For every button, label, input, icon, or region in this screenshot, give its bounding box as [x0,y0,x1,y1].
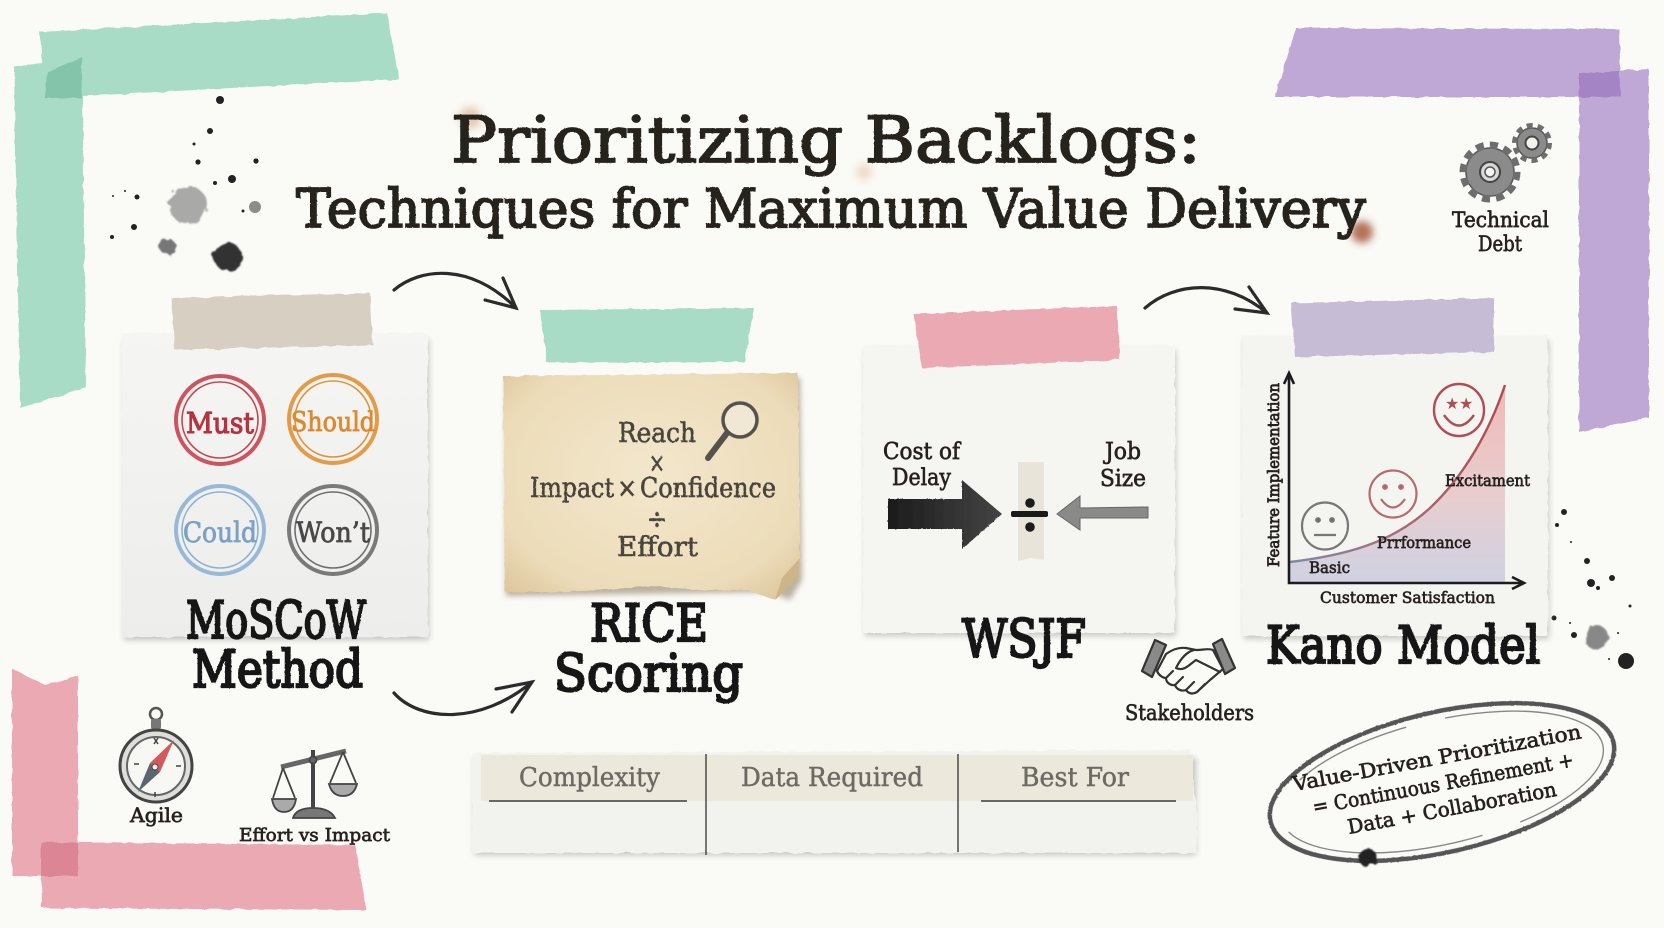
stamp: wont: Won’t [296,516,371,549]
icon: magnifier [708,403,757,458]
callout text: Value-Driven Prioritization [1290,719,1583,796]
label: cost of delay [883,439,961,491]
icon: handshake [1142,639,1235,693]
panel: kano model [1242,298,1549,639]
column dividers [489,754,1176,855]
label: technical debt: Technical [1452,208,1549,232]
kano chart [1264,373,1531,607]
panel: wsjf [863,306,1176,636]
formula: Confidence [640,473,776,504]
tape [540,308,754,363]
arrow: wsjf to kano [1145,287,1267,313]
heading: moscow method: MoSCoW [186,592,366,651]
formula: Effort [617,532,698,563]
header band [481,755,1193,801]
panel: rice [503,308,802,600]
stamp: must: Must [186,406,254,440]
curve label: performance: Prrformance [1377,533,1471,552]
ink splatter: top left [110,96,261,271]
divide sign [1011,498,1048,532]
face: smile [1370,470,1416,518]
formula: Impact [530,473,614,504]
stamp: should: Should [291,407,375,438]
header: best for: Best For [1021,763,1130,793]
paper curl [775,558,800,600]
ink splatter: bottom right [1536,509,1634,669]
axis label: y: Feature Implementation [1264,383,1283,567]
arrow: moscow to rice lower [394,682,532,715]
callout: value-driven prioritization [1255,674,1629,890]
heading: moscow method [186,592,366,700]
callout text: Data + Collaboration [1346,777,1559,839]
formula: Reach [618,418,696,449]
callout text [1290,719,1583,839]
heading: rice scoring: Scoring [554,645,743,704]
table sheet [472,750,1198,853]
icon: gears [1463,126,1550,199]
heading: moscow method: Method [192,641,363,700]
heading: wsjf: WSJF [962,610,1086,670]
axes [1284,373,1524,589]
label: cost of delay: Cost of [883,439,961,465]
paper sheet [863,346,1175,633]
stamp: should [289,375,377,463]
formula [530,418,776,563]
label: cost of delay: Delay [892,465,951,491]
stamp: must [176,376,264,464]
subtitle: Techniques for Maximum Value Delivery [296,179,1366,240]
comparison table [472,750,1198,855]
corner tape: purple top right [1275,28,1649,432]
label: technical debt: Debt [1478,232,1522,256]
label: agile: Agile [129,803,183,827]
tape [914,306,1120,368]
arrow: moscow to rice upper [394,273,516,308]
label: technical debt [1452,208,1549,256]
tape [1291,298,1494,357]
arrow: job size [1057,496,1148,530]
heading: rice scoring [554,595,743,704]
heading: rice scoring: RICE [590,595,708,654]
aged paper [503,373,800,600]
corner tape: pink bottom left [12,669,366,910]
stamp: could [176,486,264,574]
title line 1: Prioritizing Backlogs: [451,104,1201,178]
heading: kano model: Kano Model [1266,617,1540,676]
stamp: wont [289,486,377,574]
axis label: x: Customer Satisfaction [1320,588,1495,607]
face: stars: ★ [1459,394,1473,413]
title [451,104,1373,243]
formula: × [617,473,637,504]
header: complexity: Complexity [519,763,660,793]
tape [171,293,373,350]
curve label: excitement: Excitament [1445,471,1531,490]
paper sheet [1242,336,1548,636]
label: job size: Size [1100,466,1146,492]
corner tape: green top left [14,13,399,408]
face: stars [1434,384,1484,436]
label: job size: Job [1103,439,1141,465]
label: effort vs impact: Effort vs Impact [239,825,391,846]
stamp: could: Could [183,516,257,549]
face: neutral [1302,502,1348,550]
arrow: cost of delay [888,480,1002,549]
divide band [1018,462,1044,561]
formula: × [649,448,665,479]
formula: ÷ [647,502,667,537]
icon: scales [272,750,357,818]
callout text: = Continuous Refinement + [1311,747,1576,819]
label: job size [1100,439,1146,492]
header: data required: Data Required [741,763,923,793]
face: stars: ★ [1445,394,1459,413]
icon: compass [120,708,192,802]
label: stakeholders: Stakeholders [1125,701,1254,725]
panel: moscow [122,293,429,640]
curve label: basic: Basic [1309,558,1350,577]
paper sheet [122,333,428,637]
